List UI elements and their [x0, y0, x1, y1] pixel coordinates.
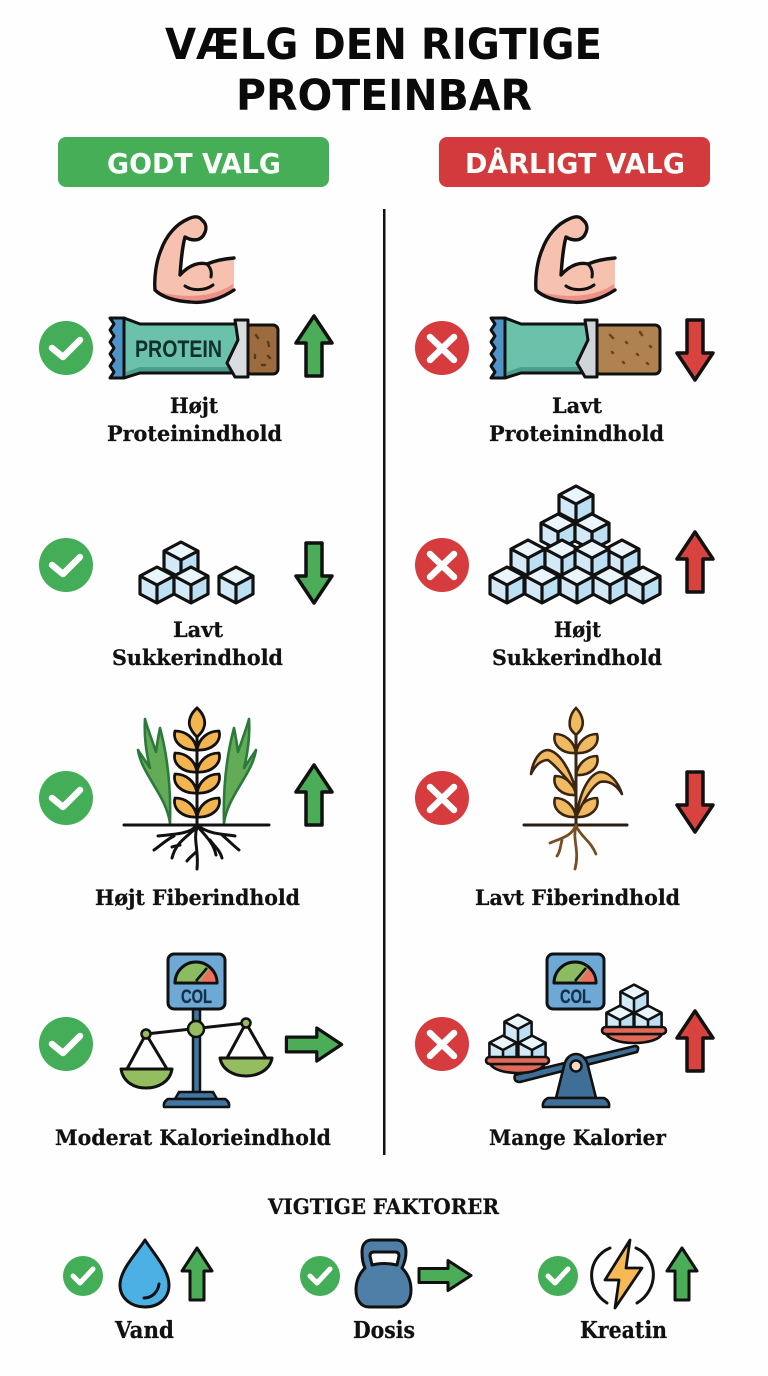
- icon: tilted scale with sugar cubes: COL: [560, 987, 591, 1008]
- heading: godt valg: GODT VALG: [107, 147, 281, 180]
- panel: kreatin: [538, 1240, 697, 1344]
- icon: tilted scale with sugar cubes: [486, 954, 666, 1107]
- panel: good protein: [39, 217, 332, 447]
- icon: cross: [415, 771, 469, 825]
- icon: few sugar cubes: [140, 542, 253, 603]
- icon: balanced scale with calorie gauge: COL: [181, 987, 212, 1008]
- label: Højt: [554, 618, 601, 643]
- icon: lightning energy: [592, 1240, 653, 1308]
- heading: godt valg: [58, 137, 329, 187]
- label: [492, 618, 662, 671]
- label: [112, 618, 283, 671]
- arrow: up: [296, 765, 332, 825]
- label: [489, 394, 664, 447]
- title: VÆLG DEN RIGTIGE: [165, 21, 602, 70]
- arrow: up: [182, 1248, 212, 1300]
- label: Proteinindhold: [489, 422, 664, 447]
- arrow: right: [419, 1260, 471, 1290]
- panel: good calories: [39, 954, 342, 1151]
- arrow: up: [677, 1011, 713, 1071]
- label: Kreatin: [580, 1317, 667, 1344]
- label: Sukkerindhold: [112, 646, 283, 671]
- icon: balanced scale with calorie gauge: [121, 954, 272, 1107]
- icon: protein bar: [110, 318, 278, 378]
- panel: dosis: [300, 1240, 471, 1344]
- icon: kettlebell: [356, 1240, 411, 1307]
- panel: bad sugar: [415, 486, 713, 671]
- icon: check: [63, 1256, 103, 1296]
- icon: check: [538, 1256, 578, 1296]
- icon: protein bar: PROTEIN: [135, 336, 222, 363]
- label: Lavt Fiberindhold: [475, 886, 680, 911]
- icon: cross: [415, 321, 469, 375]
- arrow: up: [296, 316, 332, 376]
- icon: check: [300, 1256, 340, 1296]
- label: Lavt: [173, 618, 223, 643]
- icon: cross: [415, 1017, 469, 1071]
- heading: dårligt valg: [439, 137, 710, 187]
- title: PROTEINBAR: [236, 72, 532, 121]
- icon: flexed arm: [536, 217, 615, 302]
- icon: wheat with roots: [124, 708, 269, 869]
- label: Mange Kalorier: [489, 1126, 667, 1151]
- icon: check: [39, 1017, 93, 1071]
- panel: vand: [63, 1240, 212, 1344]
- icon: cross: [415, 538, 469, 592]
- panel: bad fiber: [415, 708, 713, 911]
- arrow: up: [677, 532, 713, 592]
- label: Dosis: [353, 1317, 415, 1344]
- arrow: down: [296, 543, 332, 603]
- label: Sukkerindhold: [492, 646, 662, 671]
- label: Lavt: [552, 394, 602, 419]
- label: Moderat Kalorieindhold: [55, 1126, 331, 1151]
- icon: water drop: [120, 1240, 169, 1307]
- icon: check: [39, 538, 93, 592]
- label: Højt: [170, 394, 218, 419]
- panel: good fiber: [39, 708, 332, 911]
- heading: dårligt valg: DÅRLIGT VALG: [465, 146, 685, 180]
- panel: good sugar: [39, 538, 332, 671]
- arrow: down: [677, 320, 713, 380]
- label: Vand: [114, 1317, 174, 1344]
- icon: check: [39, 771, 93, 825]
- panel: bad calories: [415, 954, 713, 1151]
- arrow: up: [667, 1248, 697, 1300]
- heading: vigtige faktorer: VIGTIGE FAKTORER: [267, 1195, 499, 1220]
- title: [165, 21, 602, 121]
- icon: weak wheat: [524, 708, 627, 869]
- icon: low protein bar: [491, 318, 660, 378]
- icon: sugar cube pile: [490, 486, 660, 603]
- icon: flexed arm: [155, 217, 234, 302]
- label: Højt Fiberindhold: [95, 886, 300, 911]
- icon: check: [39, 321, 93, 375]
- label: Proteinindhold: [107, 422, 282, 447]
- arrow: down: [677, 772, 713, 832]
- panel: bad protein: [415, 217, 713, 447]
- arrow: right: [286, 1028, 342, 1061]
- label: [107, 394, 282, 447]
